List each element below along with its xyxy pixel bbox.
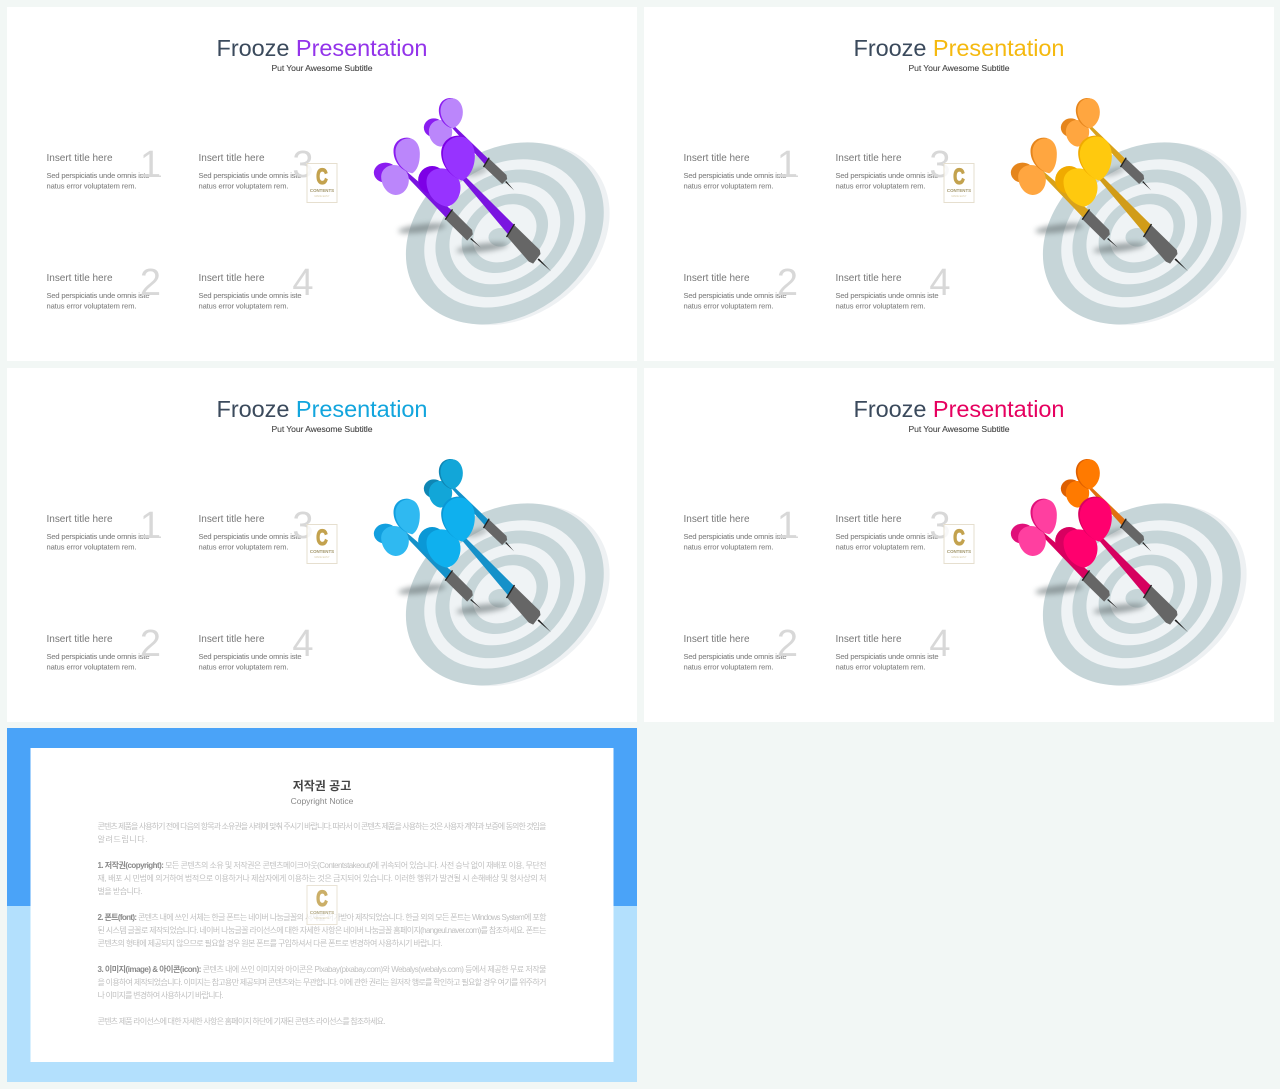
panel: blue slide [6,368,636,722]
text block 1: natus error voluptatem rem. [46,542,136,552]
text block 4: Sed perspiciatis unde omnis iste [835,291,938,300]
text block 1 [46,144,161,190]
notice section 3: 나 이미지를 변경하여 사용하시기 바랍니다. [97,990,223,1000]
notice section 1: 벌을 받습니다. [97,886,142,896]
text block 1: Sed perspiciatis unde omnis iste [46,532,149,541]
text block 2: Insert title here [46,634,112,645]
text block 4: natus error voluptatem rem. [198,662,288,672]
text block 1: Insert title here [683,153,749,164]
text block 3: natus error voluptatem rem. [835,182,925,190]
text block 1: natus error voluptatem rem. [683,542,773,552]
notice closing: 콘텐츠 제품 라이선스에 대한 자세한 사항은 홈페이지 하단에 기재된 콘텐츠 라이선스를 참조하세요. [97,1016,385,1026]
text block 3 [198,505,313,552]
text block 3: Insert title here [835,514,901,525]
text block 3: Insert title here [835,153,901,164]
text block 4: 4 [929,623,950,665]
text block 1: Sed perspiciatis unde omnis iste [46,171,149,180]
panel: purple slide [6,7,636,361]
notice intro: 콘텐츠 제품을 사용하기 전에 다음의 항목과 소유권을 사례에 맞춰 주시기 바랍니다. 따라서 이 콘텐츠 제품을 사용하는 것은 사용자 계약과 보증에 동의한 것임을 [97,821,546,831]
text block 2: natus error voluptatem rem. [683,302,773,310]
text block 4 [198,262,313,310]
text block 3: natus error voluptatem rem. [198,182,288,190]
blue upper band [6,728,636,906]
text block 4: natus error voluptatem rem. [835,662,925,672]
text block 1: Insert title here [46,153,112,164]
text block 4: natus error voluptatem rem. [198,302,288,310]
text block 2 [683,623,798,672]
text block 3: Sed perspiciatis unde omnis iste [835,171,938,180]
notice section 1 [97,860,546,896]
subtitle: Put Your Awesome Subtitle [271,63,372,73]
text block 3: natus error voluptatem rem. [835,542,925,552]
icon: contents logo [306,886,336,924]
text block 1: 1 [776,505,798,547]
text block 4: 4 [929,262,950,304]
text block 2: Sed perspiciatis unde omnis iste [46,291,149,300]
text block 2: 2 [139,262,161,304]
notice intro [97,821,546,844]
notice intro: 알려드립니다. [97,834,147,844]
text block 4: Sed perspiciatis unde omnis iste [198,291,301,300]
notice section 3: 을 이용하여 제작되었습니다. 이미지는 참고용만 제공되며 콘텐츠와는 무관합니다. 이에 관한 권리는 원저작 행로를 확인하고 필요할 경우 여기를 위주하거 [97,977,546,987]
notice subheading: Copyright Notice [290,796,353,806]
notice section 2: 된 시스템 글꼴로 제작되었습니다. 네이버 나눔글꼴 라이선스에 대한 자세한 사항은 네이버 나눔글꼴 홈페이지(hangeul.naver.com)를 참조하세요. 폰트는 [97,925,546,935]
text block 1: natus error voluptatem rem. [46,182,136,190]
text block 1: 1 [139,144,161,186]
subtitle: Put Your Awesome Subtitle [908,424,1009,434]
text block 1: Sed perspiciatis unde omnis iste [683,171,786,180]
notice section 3 [97,964,546,1000]
title: Frooze Presentation [216,35,427,61]
subtitle: Put Your Awesome Subtitle [271,424,372,434]
text block 2: Insert title here [683,273,749,284]
text block 1: natus error voluptatem rem. [683,182,773,190]
text block 2 [46,262,161,310]
text block 2: 2 [776,623,798,665]
icon: contents logo [306,164,336,202]
text block 1: Insert title here [46,514,112,525]
text block 3 [835,144,950,190]
text block 1: Insert title here [683,514,749,525]
text block 4: Insert title here [835,634,901,645]
white notice card [30,748,613,1062]
text block 3: Sed perspiciatis unde omnis iste [835,532,938,541]
text block 1 [683,144,798,190]
text block 4 [835,262,950,310]
text block 2: natus error voluptatem rem. [46,302,136,310]
text block 4: Sed perspiciatis unde omnis iste [835,652,938,661]
icon: dartboard with three darts [1007,459,1280,726]
icon: dartboard with three darts [1007,98,1280,365]
panel: yellow slide [644,7,1274,361]
text block 4 [835,623,950,672]
text block 3: Sed perspiciatis unde omnis iste [198,171,301,180]
panel: copyright notice [6,728,636,1082]
text block 3: 3 [292,144,313,186]
text block 3: natus error voluptatem rem. [198,542,288,552]
text block 2: Insert title here [46,273,112,284]
text block 2: Sed perspiciatis unde omnis iste [683,652,786,661]
text block 1 [46,505,161,552]
text block 1: 1 [776,144,798,186]
text block 3: 3 [929,144,950,186]
title: Frooze Presentation [853,396,1064,422]
notice section 2: 2. 폰트(font): 콘텐츠 내에 쓰인 서체는 한글 폰트는 네이버 나눔글꼴의 서체를 허가받아 제작되었습니다. 한글 외의 모든 폰트는 Windows System에 포함 [97,912,547,922]
notice section 1: 재, 배포 시 민법에 의거하여 법적으로 이용하거나 제삼자에게 이용하는 것은 금지되어 있습니다. 이러한 행위가 발견될 시 손해배상 및 형사상의 처 [97,873,546,883]
text block 3: 3 [292,505,313,547]
text block 2: Sed perspiciatis unde omnis iste [46,652,149,661]
text block 4: 4 [292,262,313,304]
text block 1 [683,505,798,552]
icon: contents logo [944,524,974,564]
text block 4: natus error voluptatem rem. [835,302,925,310]
notice section 3: 3. 이미지(image) & 아이콘(icon): 콘텐츠 내에 쓰인 이미지와 아이콘은 Pixabay(pixabay.com)와 Webalys(webalys.com) 등에서 제공한 무료 저작물 [97,964,546,974]
text block 2 [683,262,798,310]
subtitle: Put Your Awesome Subtitle [908,63,1009,73]
text block 2: Sed perspiciatis unde omnis iste [683,291,786,300]
text block 3 [835,505,950,552]
icon: dartboard with three darts [370,98,644,365]
text block 4: Insert title here [198,634,264,645]
panel: pink slide [644,368,1274,722]
text block 2: 2 [139,623,161,665]
text block 2: natus error voluptatem rem. [683,662,773,672]
text block 3: 3 [929,505,950,547]
notice section 1: 1. 저작권(copyright): 모든 콘텐츠의 소유 및 저작권은 콘텐츠메이크아웃(Contentstakeout)에 귀속되어 있습니다. 사전 승낙 없이 재배포 이용, 무단전 [97,860,546,870]
text block 3 [198,144,313,190]
text block 2: 2 [776,262,798,304]
text block 4: 4 [292,623,313,665]
title: Frooze Presentation [216,396,427,422]
title: Frooze Presentation [853,35,1064,61]
icon: contents logo [306,524,336,564]
text block 1: Sed perspiciatis unde omnis iste [683,532,786,541]
icon: contents logo [944,164,974,202]
text block 3: Insert title here [198,514,264,525]
text block 4: Insert title here [835,273,901,284]
text block 2 [46,623,161,672]
text block 2: Insert title here [683,634,749,645]
text block 4: Sed perspiciatis unde omnis iste [198,652,301,661]
text block 3: Insert title here [198,153,264,164]
text block 4 [198,623,313,672]
text block 2: natus error voluptatem rem. [46,662,136,672]
icon: dartboard with three darts [370,459,644,726]
text block 3: Sed perspiciatis unde omnis iste [198,532,301,541]
notice section 2: 콘텐츠의 형태에 제공되지 않으므로 필요할 경우 원본 폰트를 구입하셔서 다른 폰트로 변경하여 사용하시기 바랍니다. [97,938,442,948]
notice heading: 저작권 공고 [292,778,351,793]
text block 4: Insert title here [198,273,264,284]
text block 1: 1 [139,505,161,547]
notice section 2 [97,912,547,948]
